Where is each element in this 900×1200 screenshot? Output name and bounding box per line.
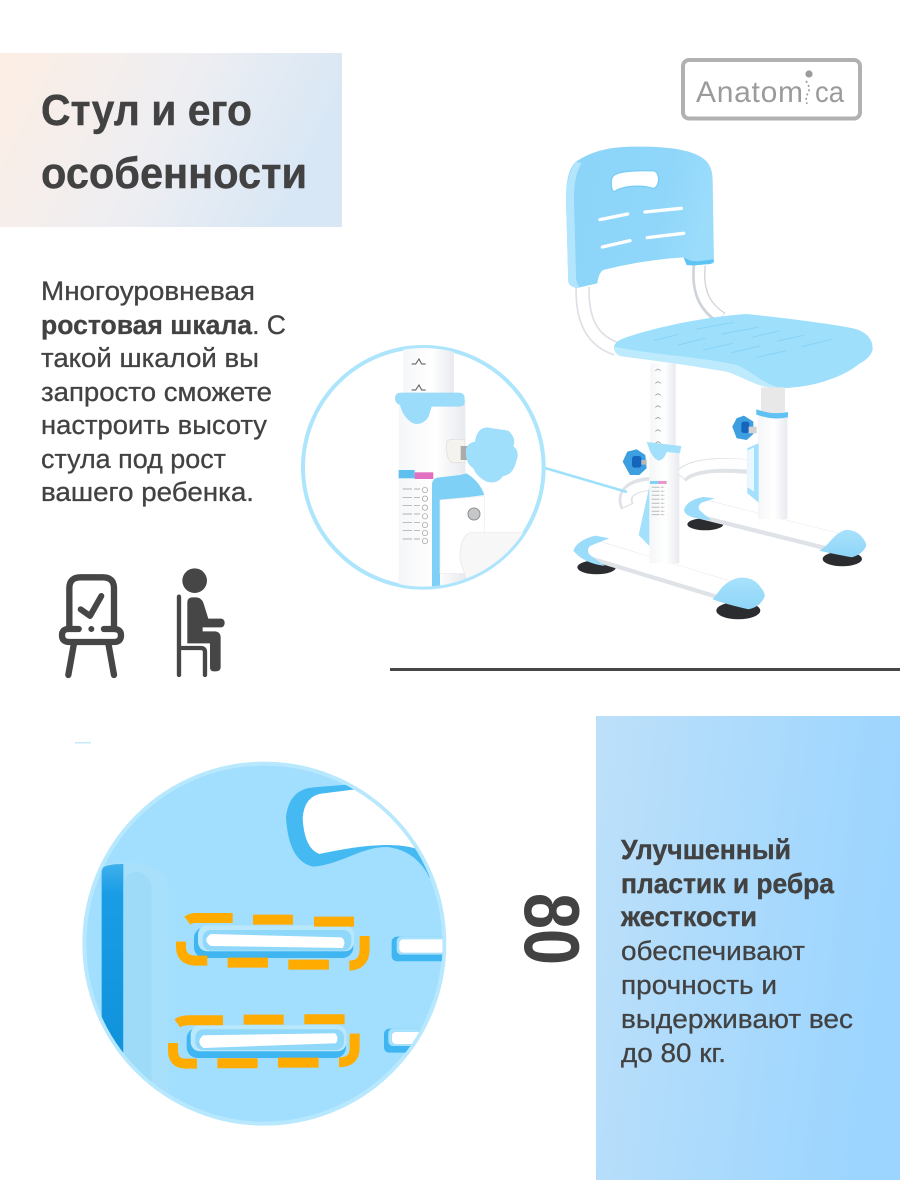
front base <box>573 442 765 609</box>
text block: height scale description <box>41 276 286 507</box>
panel: plastic and ribs <box>596 716 900 1180</box>
panel text: Улучшенный <box>621 834 791 865</box>
knobs <box>623 416 757 475</box>
feet <box>577 518 862 619</box>
divider line <box>390 668 900 671</box>
logo: Anatomica <box>683 60 860 118</box>
text block: height scale description: такой шкалой вы <box>41 343 259 373</box>
seat <box>614 314 873 388</box>
icons: chair and seated person <box>62 568 225 675</box>
panel text: прочность и <box>621 970 777 1000</box>
lower ribs <box>187 1025 437 1058</box>
logo: Anatomica: ca <box>815 76 844 109</box>
logo: Anatomica: Anatom <box>696 76 803 109</box>
text block: height scale description: стула под рост <box>41 444 226 474</box>
title text <box>41 86 307 198</box>
title text: Стул и его <box>41 86 252 135</box>
upper ribs <box>194 925 456 961</box>
chair photo <box>566 147 873 619</box>
right post <box>747 387 788 519</box>
zoom circle: backrest ribs detail <box>84 764 470 1124</box>
title text: особенности <box>41 149 307 198</box>
side edge of backrest <box>102 864 166 1092</box>
zoom circle: height scale detail <box>303 340 544 600</box>
handle opening <box>286 784 430 878</box>
orange dashed outline: upper rib <box>181 918 365 966</box>
left post with scale <box>650 363 676 450</box>
rotated number 80: 80 <box>508 893 596 965</box>
small blue mark <box>75 742 91 744</box>
back base and connecting tube <box>681 464 866 557</box>
panel text: до 80 кг. <box>621 1038 726 1068</box>
text block: height scale description: настроить высоту <box>41 410 267 440</box>
orange dashed outline: lower rib <box>173 1019 355 1064</box>
icon: seated person <box>179 568 225 675</box>
panel text <box>620 834 853 1068</box>
text block: height scale description: Многоуровневая <box>41 276 255 306</box>
icon: chair with check mark <box>62 577 121 675</box>
panel text: обеспечивают <box>621 936 805 966</box>
panel text: жесткости <box>620 901 757 932</box>
title panel <box>0 53 342 227</box>
connector line from zoom circle to chair <box>545 468 627 492</box>
panel text: пластик и ребра <box>621 868 834 899</box>
backrest <box>566 147 714 288</box>
panel text: выдерживают вес <box>621 1004 853 1034</box>
text block: height scale description: запросто сможете <box>41 377 272 407</box>
text block: height scale description: вашего ребенка. <box>41 477 254 507</box>
back tubes <box>583 265 722 349</box>
text block: height scale description: ростовая шкала. С <box>41 310 286 340</box>
